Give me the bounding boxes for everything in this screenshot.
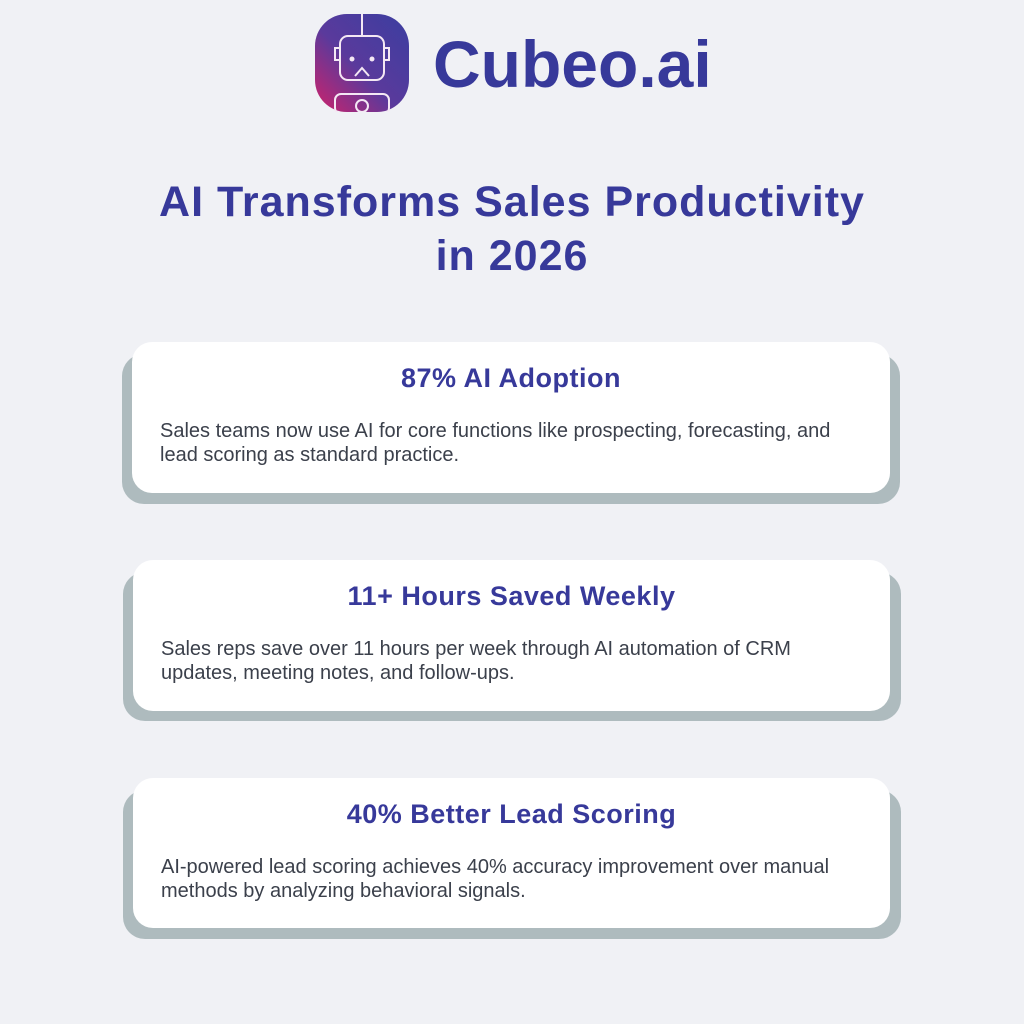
text block: AI-powered lead scoring achieves 40% accuracy improvement over manual methods by analyzing behavioral signals. (161, 856, 829, 902)
title (159, 178, 865, 280)
icon: robot (315, 14, 409, 112)
title: in 2026 (436, 232, 588, 280)
text block: Sales reps save over 11 hours per week through AI automation of CRM updates, meeting notes, and follow-ups. (161, 638, 791, 684)
heading: 40% Better Lead Scoring (347, 799, 676, 829)
panel: card 2 (123, 560, 901, 721)
text block: Sales teams now use AI for core functions like prospecting, forecasting, and lead scoring as standard practice. (160, 420, 830, 466)
heading: 11+ Hours Saved Weekly (348, 581, 675, 611)
panel: card 1 (122, 342, 900, 504)
panel: card 3 (123, 778, 901, 939)
logo (315, 14, 712, 112)
title: AI Transforms Sales Productivity (159, 178, 865, 226)
brand name: Cubeo.ai (433, 27, 712, 101)
heading: 87% AI Adoption (401, 363, 621, 393)
